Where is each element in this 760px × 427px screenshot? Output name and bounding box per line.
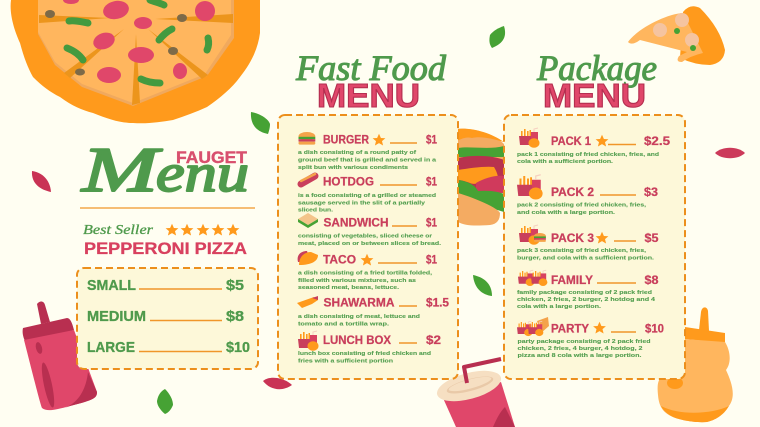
family: cola with a large portion. — [517, 304, 601, 310]
lunch box item: $2 — [426, 335, 441, 347]
pack 1: pack 1 consisting of fried chicken, fries, and — [517, 152, 660, 158]
shawarma item: a dish consisting of meat, lettuce and — [298, 314, 421, 320]
panel: pizza sizes: $10 — [226, 340, 250, 356]
burger item: $1 — [426, 134, 438, 146]
panel: pizza sizes: LARGE — [87, 340, 135, 356]
panel: pizza sizes: MEDIUM — [87, 309, 146, 325]
burger behind panels — [456, 129, 504, 226]
taco item: a dish consisting of a fried tortilla folded, — [298, 270, 432, 276]
party: party package consisting of 2 pack fried — [518, 339, 651, 345]
best seller — [83, 223, 247, 258]
ketchup bottle — [23, 301, 97, 410]
sandwich item: $1 — [426, 218, 438, 230]
family: family package consisting of 2 pack fried — [517, 290, 653, 296]
pack 2: $3 — [644, 187, 658, 199]
heading: package menu: Package — [536, 48, 657, 88]
best seller: PEPPERONI PIZZA — [84, 239, 247, 258]
pack 2: PACK 2 — [551, 187, 594, 199]
heading: package menu: MENU — [543, 77, 646, 114]
burger item — [298, 132, 438, 171]
family: $8 — [644, 275, 659, 287]
pizza slice top right — [628, 6, 725, 65]
shawarma item: $1.5 — [426, 298, 450, 310]
pack 1: $2.5 — [644, 136, 671, 148]
sandwich item: meat, placed on or between slices of bread. — [298, 241, 441, 247]
panel: pizza sizes: $5 — [226, 278, 244, 294]
hotdog item: HOTDOG — [323, 176, 374, 188]
burger item: ground beef that is grilled and served in a — [298, 158, 437, 164]
sandwich item: SANDWICH — [324, 218, 388, 230]
panel: packages — [504, 115, 685, 379]
title: Fauget Menu: M — [81, 134, 163, 205]
pack 2 — [517, 175, 658, 216]
heading: fast food menu — [295, 48, 447, 114]
heading: fast food menu: Fast Food — [295, 48, 447, 88]
taco item: $1 — [426, 254, 438, 266]
heading: package menu — [536, 48, 657, 114]
pack 3: burger, and cola with a sufficient portion. — [517, 256, 654, 262]
hotdog item — [298, 174, 438, 214]
party: chicken, 2 fries, 4 burger, 4 hotdog, 2 — [518, 346, 642, 352]
shawarma item: SHAWARMA — [324, 298, 394, 310]
title: Fauget Menu: enu — [156, 143, 249, 203]
panel: pizza sizes — [77, 268, 258, 369]
party: pizza and 8 cola with a large portion. — [518, 353, 642, 359]
pack 3 — [517, 225, 659, 262]
taco item — [298, 251, 438, 291]
pack 1: cola with a sufficient portion. — [517, 159, 613, 165]
pack 1 — [517, 128, 671, 165]
pack 3: pack 3 consisting of fried chicken, fries, — [517, 248, 646, 254]
shawarma item — [297, 296, 450, 328]
shawarma item: tomato and a tortilla wrap. — [298, 322, 389, 328]
pack 1: PACK 1 — [551, 136, 592, 148]
soda cup — [434, 359, 515, 427]
pizza top left — [11, 0, 260, 123]
party: $10 — [645, 324, 664, 336]
pack 3: PACK 3 — [551, 233, 594, 245]
pack 2: pack 2 consisting of fried chicken, fries, — [517, 202, 646, 208]
party: PARTY — [551, 324, 589, 336]
taco item: seasoned meat, beans, lettuce. — [298, 285, 399, 291]
pack 3: $5 — [644, 233, 659, 245]
burger item: split bun with various condiments — [298, 165, 408, 171]
best seller: Best Seller — [83, 223, 154, 238]
pack 2: and cola with a large portion. — [517, 210, 615, 216]
title: Fauget Menu — [81, 134, 249, 205]
taco item: TACO — [323, 254, 356, 266]
mustard bottle — [658, 307, 733, 422]
panel: fast food — [278, 115, 458, 379]
hotdog item: sausage served in the slit of a partially — [298, 200, 426, 206]
family — [517, 270, 659, 310]
burger item: a dish consisting of a round patty of — [298, 150, 416, 156]
title: Fauget Menu: FAUGET — [176, 148, 248, 167]
lunch box item: LUNCH BOX — [323, 335, 391, 347]
family: FAMILY — [551, 275, 593, 287]
hotdog item: $1 — [426, 176, 438, 188]
party — [517, 317, 664, 359]
panel: pizza sizes: $8 — [226, 309, 244, 325]
sandwich item: consisting of vegetables, sliced cheese or — [298, 234, 433, 240]
sandwich item — [298, 213, 441, 247]
panel: pizza sizes: SMALL — [87, 278, 136, 294]
taco item: filled with various mixtures, such as — [298, 278, 416, 284]
lunch box item: fries with a sufficient portion — [298, 358, 394, 364]
burger item: BURGER — [323, 134, 370, 146]
hotdog item: sliced bun. — [298, 208, 333, 214]
lunch box item: lunch box consisting of fried chicken and — [298, 351, 432, 357]
heading: fast food menu: MENU — [317, 77, 420, 114]
family: chicken, 2 fries, 2 burger, 2 hotdog and 4 — [517, 297, 656, 303]
hotdog item: is a food consisting of a grilled or steamed — [298, 193, 437, 199]
lunch box item — [298, 331, 441, 364]
